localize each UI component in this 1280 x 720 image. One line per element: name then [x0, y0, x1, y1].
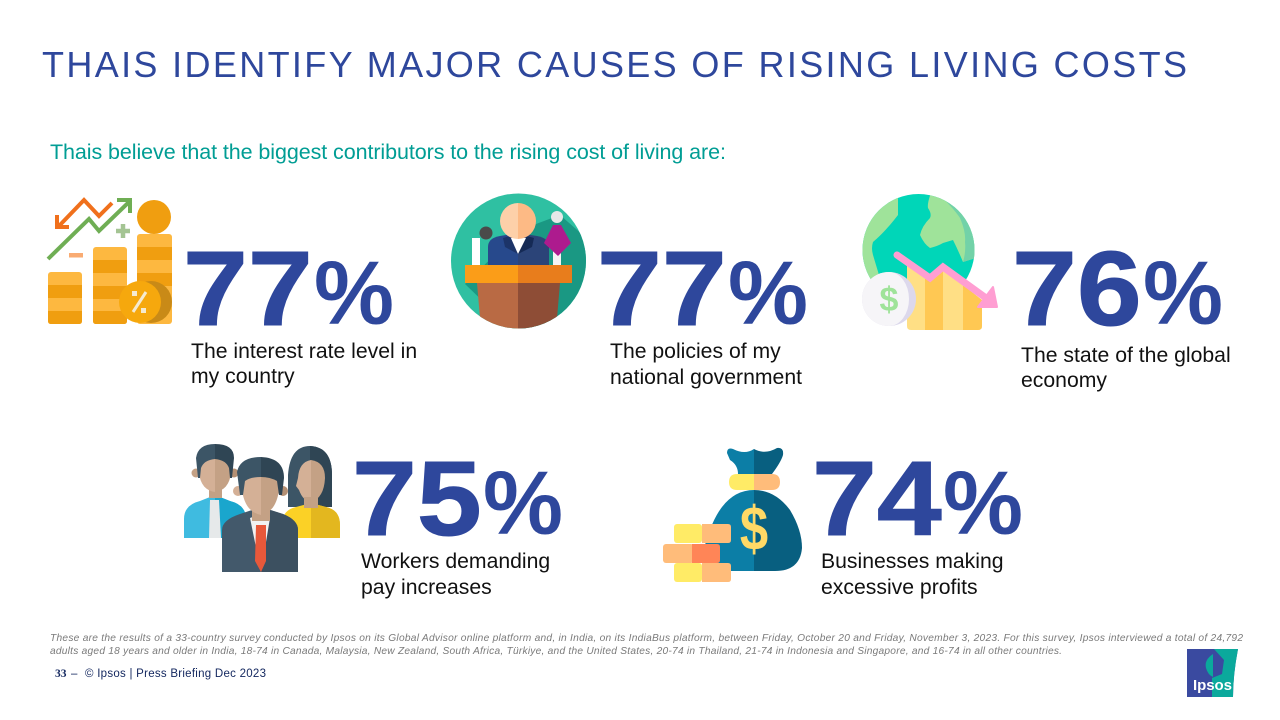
- subtitle: Thais believe that the biggest contributors to the rising cost of living are:: [50, 140, 726, 164]
- icon: globe with falling chart: [862, 194, 998, 330]
- label: workers: pay increases: [361, 576, 492, 599]
- stat: 76%: 76: [1012, 229, 1142, 348]
- panel: businesses: [663, 439, 1023, 599]
- stat: 76%: [1012, 229, 1223, 348]
- stat: 76%: %: [1143, 244, 1223, 344]
- stat: 77%: %: [728, 244, 808, 344]
- footer: page number and source: 33: [55, 668, 67, 680]
- stat: 74%: %: [943, 454, 1023, 554]
- panel: interest rate: [48, 200, 417, 388]
- label: businesses: excessive profits: [821, 576, 978, 599]
- footnote: These are the results of a 33-country survey conducted by Ipsos on its Global Advisor online platform and, in India, on its IndiaBus platform, between Friday, October 20 and Friday, November 3, 2023. For this survey, Ipsos interviewed a total of 24,792: [50, 633, 1243, 644]
- icon: globe with falling chart: $: [880, 281, 899, 319]
- stat: 77%: %: [314, 244, 394, 344]
- icon: group of workers: [184, 444, 340, 572]
- logo: Ipsos: Ipsos: [1193, 677, 1232, 694]
- stat: 74%: 74: [812, 439, 942, 558]
- stat: 75%: [352, 439, 563, 558]
- label: businesses: Businesses making: [821, 550, 1004, 573]
- icon: coin stacks with arrows: [48, 200, 172, 324]
- stat: 77%: 77: [597, 229, 727, 348]
- stat: 74%: [812, 439, 1023, 558]
- title: THAIS IDENTIFY MAJOR CAUSES OF RISING LIVING COSTS: [42, 44, 1187, 85]
- label: government: The policies of my: [610, 340, 781, 363]
- stat: 77%: [183, 229, 394, 348]
- footer: page number and source: © Ipsos | Press Briefing Dec 2023: [85, 668, 266, 680]
- icon: money bag and coins: [663, 448, 802, 582]
- icon: money bag and coins: $: [740, 495, 768, 564]
- stat: 75%: 75: [352, 439, 482, 558]
- label: interest rate: my country: [191, 365, 295, 388]
- icon: speaker at podium: [451, 194, 586, 328]
- label: workers: Workers demanding: [361, 550, 550, 573]
- label: interest rate: The interest rate level in: [191, 340, 417, 363]
- label: global economy: The state of the global: [1021, 344, 1231, 367]
- stat: 77%: 77: [183, 229, 313, 348]
- panel: global economy: [850, 190, 1231, 392]
- logo: Ipsos: [1187, 649, 1238, 697]
- label: global economy: economy: [1021, 369, 1107, 392]
- stat: 77%: [597, 229, 808, 348]
- panel: government policies: [451, 194, 808, 389]
- stat: 75%: %: [483, 454, 563, 554]
- panel: workers: [184, 439, 563, 599]
- footer: page number and source: –: [71, 668, 78, 680]
- footnote: adults aged 18 years and older in India, 18-74 in Canada, Malaysia, New Zealand, South Africa, Türkiye, and the United States, 20-74 in Thailand, 21-74 in Indonesia and Singapore, and 16-74 in all other countries.: [50, 646, 1062, 657]
- label: government: national government: [610, 366, 802, 389]
